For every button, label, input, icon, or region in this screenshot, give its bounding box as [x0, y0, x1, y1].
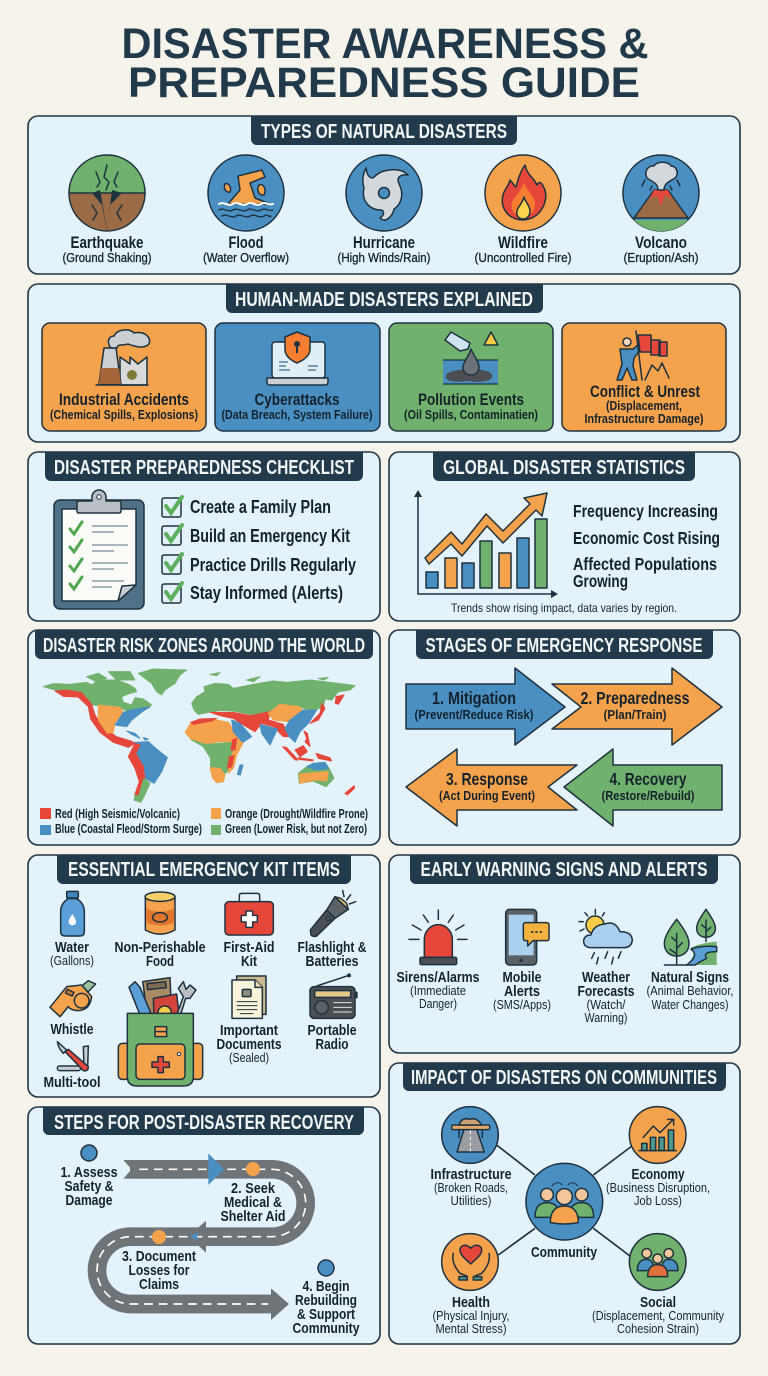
- panel: impact on communities: [389, 1063, 740, 1344]
- heading: preparedness checklist: [45, 452, 363, 481]
- node: health: [442, 1234, 498, 1290]
- icon: oil spill: [443, 332, 498, 384]
- heading: types of natural disasters: TYPES OF NATURAL DISASTERS: [261, 121, 507, 143]
- legend: Blue (Coastal Fleod/Storm Surge): [55, 821, 202, 836]
- label: hurricane: (High Winds/Rain): [338, 250, 430, 265]
- icon: siren: [409, 910, 467, 965]
- warning labels: Mobile: [502, 969, 542, 986]
- step labels: Damage: [66, 1192, 112, 1209]
- card: cyberattacks: Cyberattacks: [254, 391, 340, 409]
- kit labels, lower rows: Documents: [216, 1036, 282, 1053]
- heading: impact: [403, 1063, 726, 1091]
- kit labels, top row: Batteries: [306, 953, 358, 970]
- impact labels: Community: [531, 1244, 598, 1261]
- card: cyberattacks: [215, 323, 380, 431]
- checklist items: Build an Emergency Kit: [190, 526, 350, 546]
- card: pollution events: (Oil Spills, Contaminatien): [404, 407, 538, 422]
- label: volcano: [624, 234, 698, 265]
- card: conflict and unrest: (Displacement,: [606, 398, 682, 413]
- panel: early warning signs: [389, 855, 740, 1053]
- impact labels: (Displacement, Community: [592, 1308, 724, 1323]
- icon: weather: [579, 909, 632, 964]
- arrow: mitigation: [406, 668, 565, 745]
- icon: multi-tool: [57, 1042, 88, 1071]
- kit labels, lower rows: (Sealed): [229, 1050, 269, 1065]
- statistics text: Growing: [573, 571, 628, 591]
- label: earthquake: (Ground Shaking): [62, 250, 152, 265]
- icon: person with flag: [617, 331, 669, 380]
- step labels: & Support: [297, 1306, 355, 1323]
- panel: emergency kit: [28, 855, 380, 1097]
- node: infrastructure: [442, 1107, 498, 1163]
- impact labels: (Broken Roads,: [434, 1180, 508, 1195]
- arrow: response: [406, 749, 577, 826]
- card: conflict and unrest: Conflict & Unrest: [590, 383, 700, 401]
- panel: types of natural disasters: [28, 116, 740, 274]
- note: Trends show rising impact, data varies by region.: [451, 601, 677, 615]
- icon: radio: [310, 973, 358, 1018]
- icon: wildfire: [485, 155, 561, 231]
- label: wildfire: [474, 234, 572, 265]
- panel: post-disaster recovery: [28, 1107, 380, 1344]
- card: conflict and unrest: [562, 323, 726, 431]
- warning labels: Sirens/Alarms: [396, 969, 480, 986]
- checklist items: Stay Informed (Alerts): [190, 583, 343, 603]
- arrow: response: (Act During Event): [439, 788, 535, 803]
- card: pollution events: Pollution Events: [418, 391, 524, 409]
- warning labels: Alerts: [504, 983, 540, 1000]
- icon: laptop and shield: [267, 332, 328, 385]
- heading: recovery: STEPS FOR POST-DISASTER RECOVERY: [54, 1112, 354, 1134]
- kit labels, top row: First-Aid: [224, 939, 274, 956]
- label: hurricane: Hurricane: [353, 234, 415, 252]
- card: industrial accidents: (Chemical Spills, Explosions): [50, 407, 198, 422]
- warning labels: Danger): [419, 996, 457, 1011]
- kit labels, lower rows: Portable: [308, 1022, 356, 1039]
- impact labels: Economy: [632, 1166, 685, 1183]
- label: flood: (Water Overflow): [203, 250, 289, 265]
- road path: [97, 1153, 306, 1320]
- node: social: [629, 1234, 686, 1290]
- impact labels: [430, 1166, 724, 1336]
- bar chart with rising trend arrow: [414, 490, 558, 598]
- heading: risk zones: DISASTER RISK ZONES AROUND THE WORLD: [43, 635, 365, 657]
- legend: Green (Lower Risk, but not Zero): [225, 821, 367, 836]
- icon: documents: [232, 976, 266, 1018]
- panel: stages of emergency response: [389, 630, 740, 845]
- kit labels, top row: Water: [55, 939, 89, 956]
- kit labels, top row: (Gallons): [50, 953, 94, 968]
- statistics text: Affected Populations: [573, 554, 717, 574]
- checklist items: [162, 497, 356, 603]
- impact labels: Social: [640, 1294, 676, 1311]
- impact labels: Mental Stress): [436, 1321, 506, 1336]
- heading: risk zones: [35, 630, 373, 659]
- statistics text: Economic Cost Rising: [573, 528, 720, 548]
- kit labels, lower rows: [44, 1021, 356, 1091]
- step labels: Shelter Aid: [220, 1208, 286, 1225]
- heading: stages: [416, 630, 713, 659]
- statistics text: [573, 501, 720, 591]
- step labels: Community: [292, 1320, 360, 1337]
- impact labels: Job Loss): [634, 1193, 682, 1208]
- arrow: preparedness: [552, 668, 722, 745]
- panel: global statistics: [389, 452, 740, 621]
- title: PREPAREDNESS GUIDE: [128, 59, 640, 107]
- arrow: recovery: [564, 749, 722, 826]
- kit labels, lower rows: Whistle: [50, 1021, 94, 1038]
- legend: Orange (Drought/Wildfire Prone): [225, 806, 368, 821]
- label: flood: Flood: [228, 234, 264, 252]
- road markers: [81, 1145, 334, 1276]
- heading: global statistics: GLOBAL DISASTER STATISTICS: [443, 457, 685, 479]
- icon: earthquake: [69, 155, 145, 231]
- arrow: preparedness: 2. Preparedness: [580, 688, 690, 708]
- kit labels, top row: Food: [146, 953, 174, 970]
- impact labels: Infrastructure: [430, 1166, 512, 1183]
- label: earthquake: Earthquake: [70, 234, 144, 252]
- icon: flashlight: [310, 891, 356, 936]
- icon: water bottle: [61, 891, 84, 936]
- heading: types of natural disasters: [251, 116, 517, 145]
- kit labels, top row: Kit: [241, 953, 257, 970]
- icon: hurricane: [346, 155, 422, 231]
- heading: kit: [57, 855, 351, 884]
- step labels: Losses for: [128, 1262, 190, 1279]
- step labels: 2. Seek: [231, 1180, 276, 1197]
- label: wildfire: (Uncontrolled Fire): [474, 250, 572, 265]
- heading: kit: ESSENTIAL EMERGENCY KIT ITEMS: [68, 859, 340, 881]
- heading: global statistics: [433, 452, 695, 481]
- world map: [43, 669, 355, 802]
- icon: whistle: [50, 981, 96, 1017]
- kit labels, top row: [50, 939, 367, 970]
- heading: preparedness checklist: DISASTER PREPAREDNESS CHECKLIST: [54, 457, 354, 479]
- node: community: [526, 1163, 603, 1240]
- arrow: mitigation: 1. Mitigation: [432, 688, 516, 708]
- node: economy: [629, 1107, 686, 1163]
- icon: backpack with supplies: [118, 978, 203, 1086]
- icon: food can: [145, 892, 175, 934]
- step labels: 3. Document: [122, 1248, 196, 1265]
- step labels: Medical &: [224, 1194, 282, 1211]
- impact labels: Health: [452, 1294, 490, 1311]
- icon: flood: [208, 155, 284, 231]
- step labels: 4. Begin: [302, 1278, 350, 1295]
- warning labels: Forecasts: [578, 983, 634, 1000]
- warning labels: (Watch/: [586, 997, 626, 1012]
- step labels: 1. Assess: [60, 1164, 118, 1181]
- card: cyberattacks: (Data Breach, System Failure): [222, 407, 372, 422]
- kit labels, lower rows: Important: [220, 1022, 278, 1039]
- legend: [40, 806, 368, 836]
- kit labels, lower rows: Multi-tool: [44, 1074, 100, 1091]
- arrow: recovery: 4. Recovery: [610, 769, 687, 789]
- warning labels: (SMS/Apps): [493, 997, 551, 1012]
- title: DISASTER AWARENESS &: [122, 20, 648, 68]
- icon: natural signs: [664, 909, 717, 965]
- icon: first-aid kit: [225, 893, 273, 935]
- warning labels: (Immediate: [410, 983, 466, 998]
- hub connectors: [497, 1145, 633, 1256]
- step labels: Claims: [139, 1276, 179, 1293]
- arrow: response: 3. Response: [446, 769, 528, 789]
- arrow: recovery: (Restore/Rebuild): [602, 788, 694, 803]
- label: volcano: Volcano: [635, 234, 687, 252]
- panel: preparedness checklist: [28, 452, 380, 621]
- label: flood: [203, 234, 289, 265]
- card: conflict and unrest: Infrastructure Damage): [584, 411, 704, 426]
- panel: human-made disasters: [28, 284, 740, 442]
- heading: human-made disasters: [226, 284, 543, 313]
- step labels: Safety &: [64, 1178, 114, 1195]
- icon: mobile alert: [506, 909, 549, 965]
- warning labels: Warning): [584, 1010, 628, 1025]
- panel: risk zones map: [28, 630, 380, 845]
- legend: Red (High Seismic/Volcanic): [55, 806, 180, 821]
- label: wildfire: Wildfire: [498, 234, 548, 252]
- label: volcano: (Eruption/Ash): [624, 250, 698, 265]
- warning labels: Water Changes): [652, 997, 728, 1012]
- kit labels, lower rows: Radio: [316, 1036, 348, 1053]
- card: industrial accidents: [42, 323, 206, 431]
- impact labels: (Physical Injury,: [432, 1308, 510, 1323]
- kit labels, top row: Non-Perishable: [114, 939, 206, 956]
- icon: clipboard: [54, 490, 144, 609]
- arrow: preparedness: (Plan/Train): [604, 707, 666, 722]
- kit labels, top row: Flashlight &: [298, 939, 367, 956]
- impact labels: Utilities): [450, 1193, 492, 1208]
- warning labels: [396, 969, 734, 1025]
- card: pollution events: [389, 323, 553, 431]
- icon: volcano: [623, 155, 699, 231]
- card: industrial accidents: Industrial Accidents: [59, 391, 189, 409]
- arrow: mitigation: (Prevent/Reduce Risk): [414, 707, 534, 722]
- checklist items: Practice Drills Regularly: [190, 555, 356, 575]
- checklist items: Create a Family Plan: [190, 497, 331, 517]
- heading: warning signs: [410, 855, 718, 884]
- warning labels: Natural Signs: [651, 969, 729, 986]
- icon: factory: [96, 330, 150, 385]
- label: earthquake: [62, 234, 152, 265]
- label: hurricane: [338, 234, 430, 265]
- heading: recovery: [43, 1107, 364, 1135]
- impact labels: (Business Disruption,: [606, 1180, 710, 1195]
- statistics text: Frequency Increasing: [573, 501, 718, 521]
- step labels: Rebuilding: [295, 1292, 357, 1309]
- step labels: [60, 1164, 360, 1337]
- impact labels: Cohesion Strain): [617, 1321, 699, 1336]
- warning labels: (Animal Behavior,: [646, 983, 734, 998]
- title: [122, 20, 648, 107]
- heading: human-made disasters: HUMAN-MADE DISASTERS EXPLAINED: [235, 289, 533, 311]
- warning labels: Weather: [582, 969, 630, 986]
